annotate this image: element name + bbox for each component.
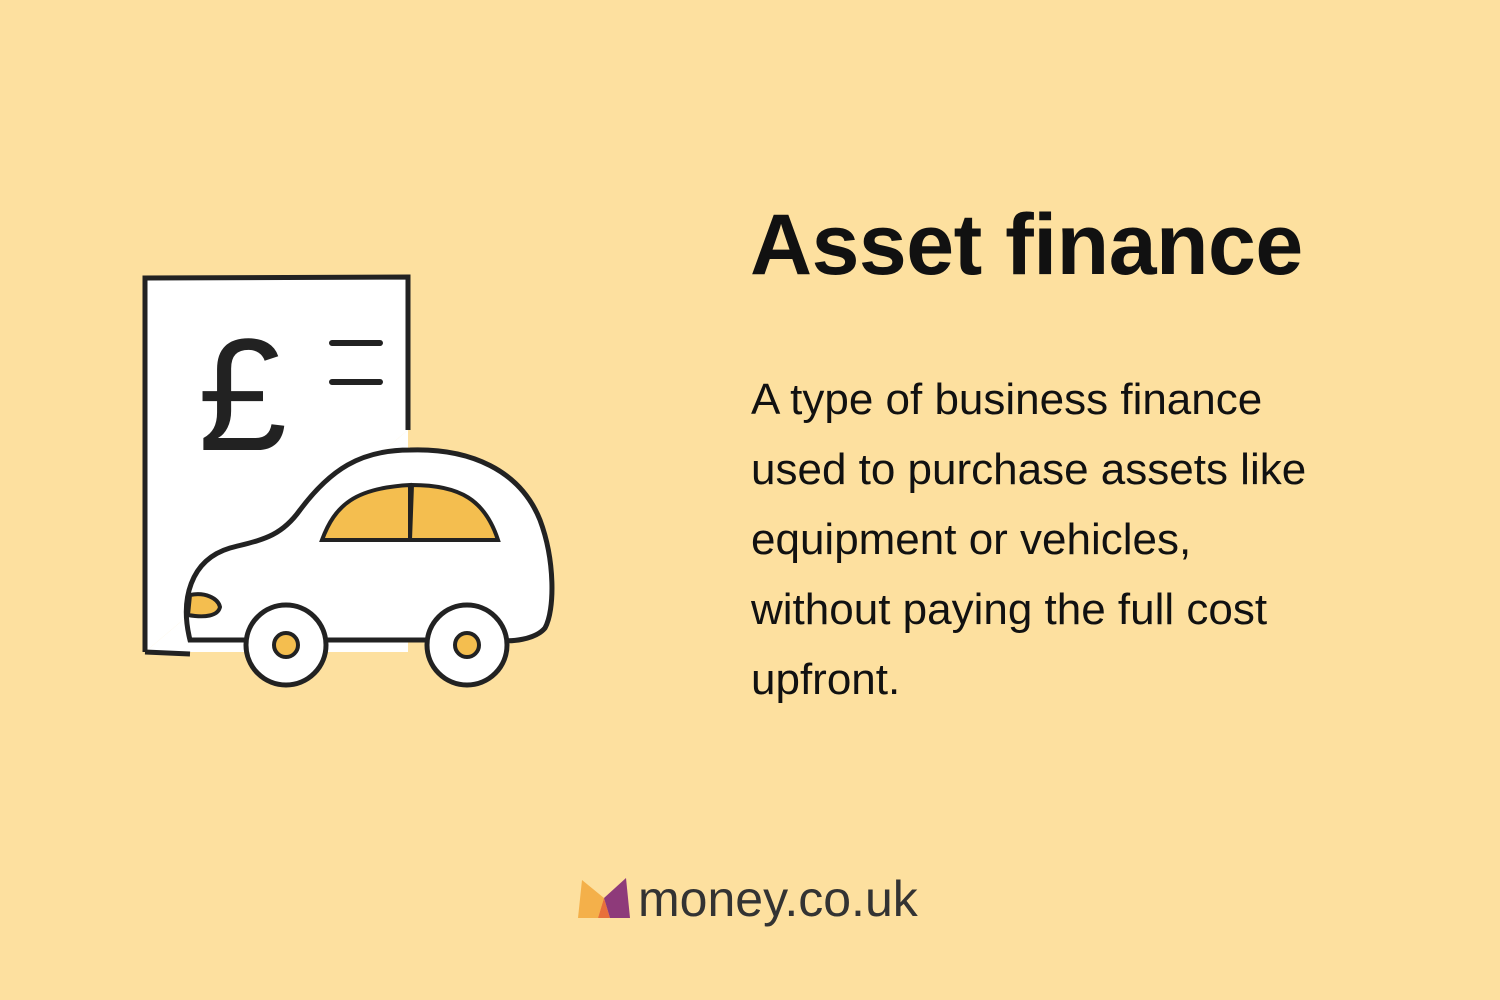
body text	[751, 375, 1306, 704]
body text: equipment or vehicles,	[751, 515, 1191, 564]
logo: money.co.uk	[638, 871, 918, 927]
body text: upfront.	[751, 655, 900, 704]
title: Asset finance	[750, 197, 1303, 293]
body text: used to purchase assets like	[751, 445, 1306, 494]
pound sign: £	[198, 305, 287, 484]
illustration: invoice and car	[142, 274, 554, 688]
body text: without paying the full cost	[751, 585, 1267, 634]
car	[186, 450, 552, 685]
body text: A type of business finance	[751, 375, 1262, 424]
document	[145, 277, 408, 654]
